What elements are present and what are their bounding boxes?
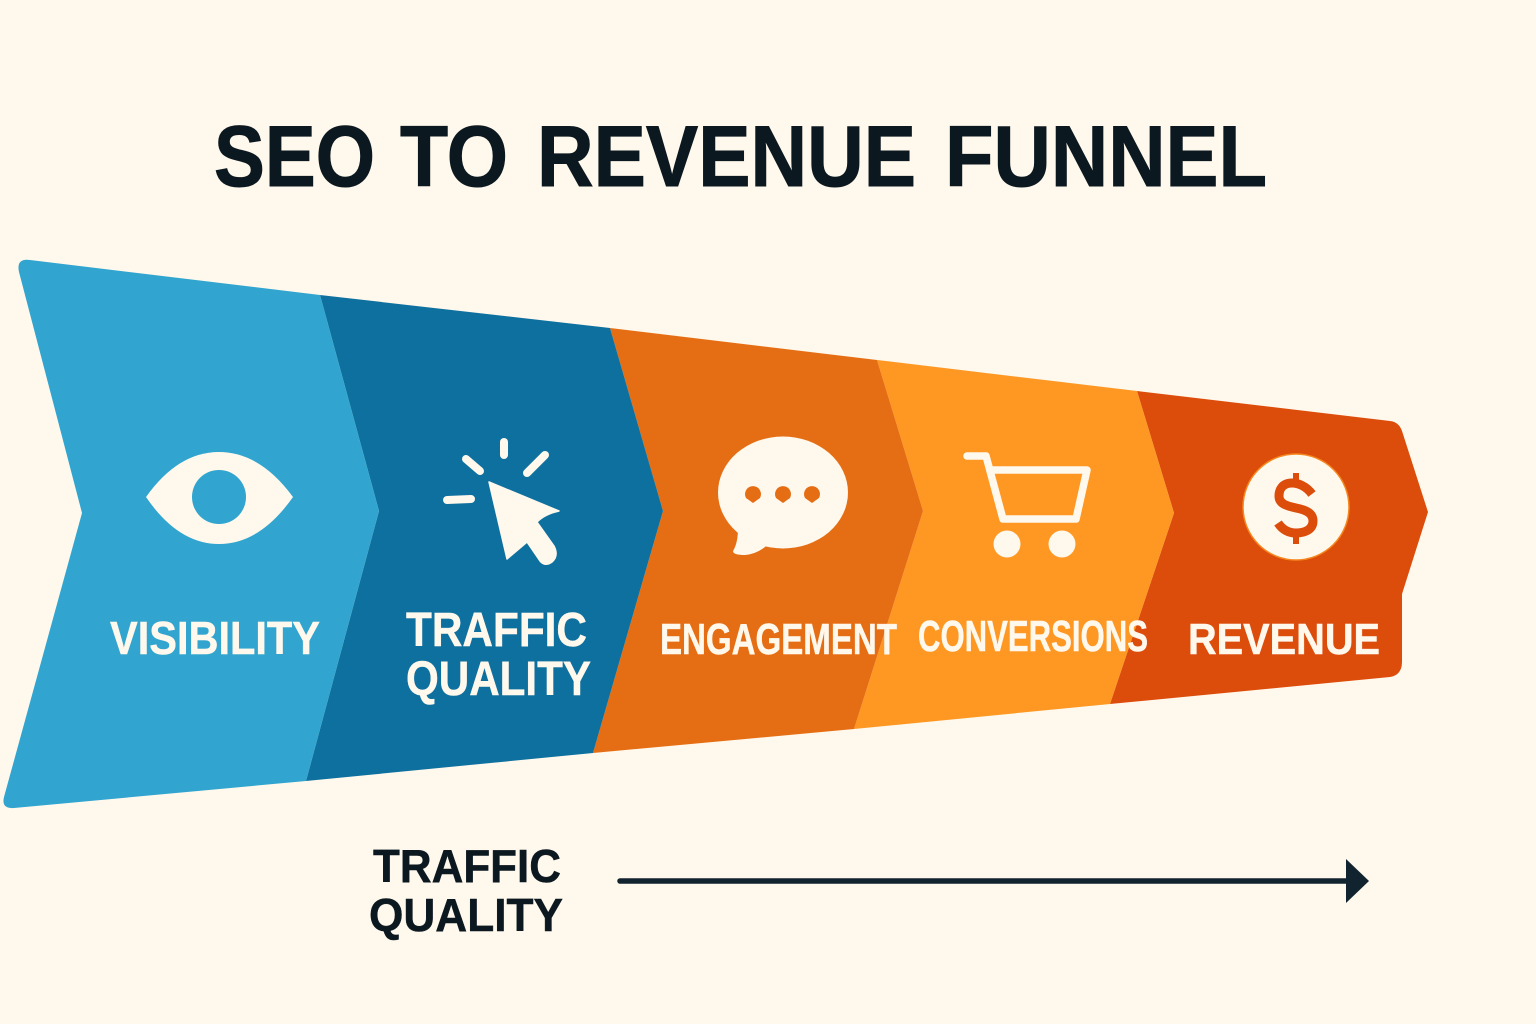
panel: conversions	[854, 360, 1174, 729]
label: visibility: VISIBILITY	[110, 612, 320, 664]
label: revenue: REVENUE	[1188, 615, 1380, 664]
panel: engagement	[593, 328, 923, 753]
label: traffic quality	[406, 604, 591, 706]
panel: revenue	[1110, 391, 1428, 704]
title	[214, 109, 1267, 205]
title: FUNNEL	[945, 109, 1267, 205]
panel: traffic quality	[306, 295, 663, 781]
label: engagement: ENGAGEMENT	[660, 615, 897, 664]
title: SEO	[214, 109, 375, 205]
label: conversions: CONVERSIONS	[918, 612, 1148, 661]
title: REVENUE	[537, 109, 916, 205]
axis label: traffic quality: QUALITY	[369, 889, 563, 941]
icon: speech bubble	[718, 436, 848, 555]
axis label: traffic quality	[369, 840, 563, 941]
icon: shopping cart	[967, 456, 1087, 558]
label: traffic quality: QUALITY	[406, 653, 591, 706]
icon: eye	[146, 452, 293, 544]
axis label: traffic quality: TRAFFIC	[373, 840, 561, 892]
title: TO	[400, 109, 508, 205]
arrow	[620, 859, 1369, 903]
icon: dollar coin	[1243, 454, 1349, 560]
funnel	[3, 260, 1428, 808]
label: traffic quality: TRAFFIC	[406, 604, 587, 657]
panel: visibility	[3, 260, 379, 808]
icon: cursor click	[447, 442, 559, 564]
